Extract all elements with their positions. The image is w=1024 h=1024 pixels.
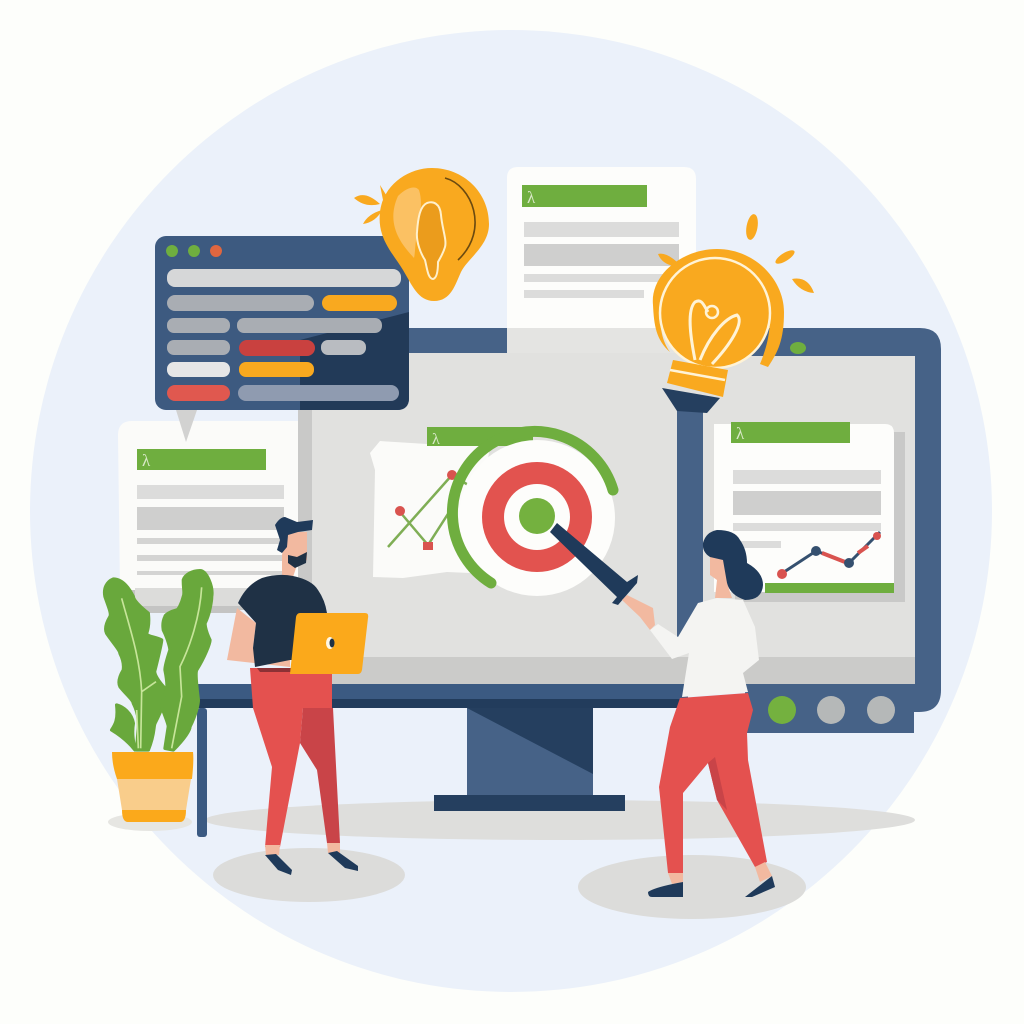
legs [250,668,332,847]
target chart panel [370,427,638,605]
person left [227,517,368,875]
hand arm [622,595,655,630]
target [452,431,615,596]
hair [275,517,313,553]
document: left [118,410,300,613]
small lightbulb [354,168,489,301]
plant pot [112,752,193,822]
legs [659,693,767,873]
document: left: λ [142,451,151,470]
beard [288,552,307,568]
laptop [290,613,368,674]
arm skin [227,608,290,667]
plant [105,571,212,750]
neck [282,532,307,577]
hair [703,530,763,600]
shoes [265,854,292,875]
torso [238,575,327,667]
white backing with chart [370,441,490,578]
monitor stand [434,708,625,811]
document: right [714,422,905,602]
large lightbulb [653,213,814,413]
left leaf [105,579,167,750]
shoes [648,882,683,897]
pointer [550,523,638,605]
line chart on panel [388,470,486,550]
small leaf [112,705,135,750]
desk [188,684,688,837]
browser window panel [155,236,409,410]
document: top centre: λ [527,188,536,207]
right leaf [162,571,212,750]
monitor buttons [768,696,895,724]
document: top centre [507,167,696,344]
target chart panel: λ [432,431,440,448]
large monitor [298,328,941,733]
belt [257,668,292,672]
neck and face [710,555,732,598]
torso [650,598,759,697]
floor shadows [108,800,915,919]
line chart [777,532,881,579]
green header bar [427,427,533,446]
document: right: λ [736,424,745,443]
person right [622,530,775,897]
